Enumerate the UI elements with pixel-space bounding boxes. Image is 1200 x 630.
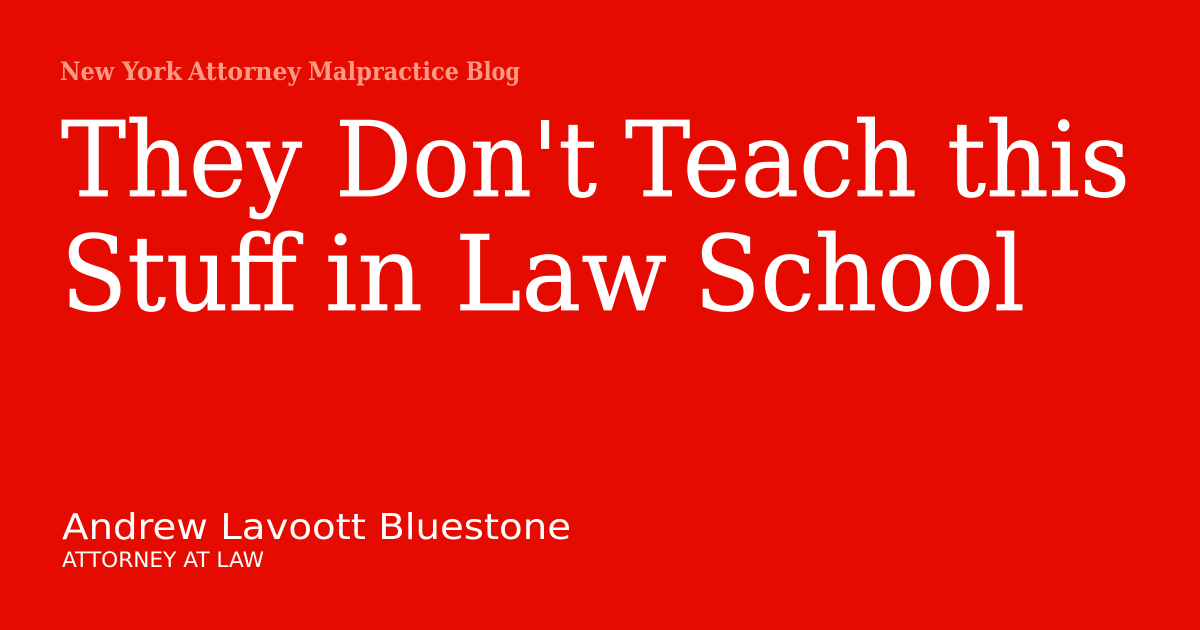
title line 1	[61, 99, 1130, 221]
author name: Andrew Lavoott Bluestone	[62, 507, 571, 548]
author block	[62, 507, 571, 572]
author role: ATTORNEY AT LAW	[62, 548, 264, 572]
title line 2: School	[694, 213, 1025, 335]
blog name	[60, 57, 520, 86]
title line 2: in	[325, 213, 423, 335]
title line 1: Teach	[625, 99, 917, 221]
title line 2	[61, 213, 1025, 335]
title line 1: this	[947, 99, 1130, 221]
blog name: York	[121, 57, 183, 86]
blog name: Attorney	[187, 57, 302, 86]
title line 1: They	[61, 99, 302, 221]
title	[61, 99, 1130, 335]
blog name: Malpractice	[308, 57, 459, 86]
blog name: Blog	[466, 57, 520, 86]
title line 2: Stuff	[61, 213, 304, 335]
title line 1: Don't	[335, 99, 597, 221]
title line 2: Law	[455, 213, 667, 335]
blog name: New	[60, 57, 115, 86]
